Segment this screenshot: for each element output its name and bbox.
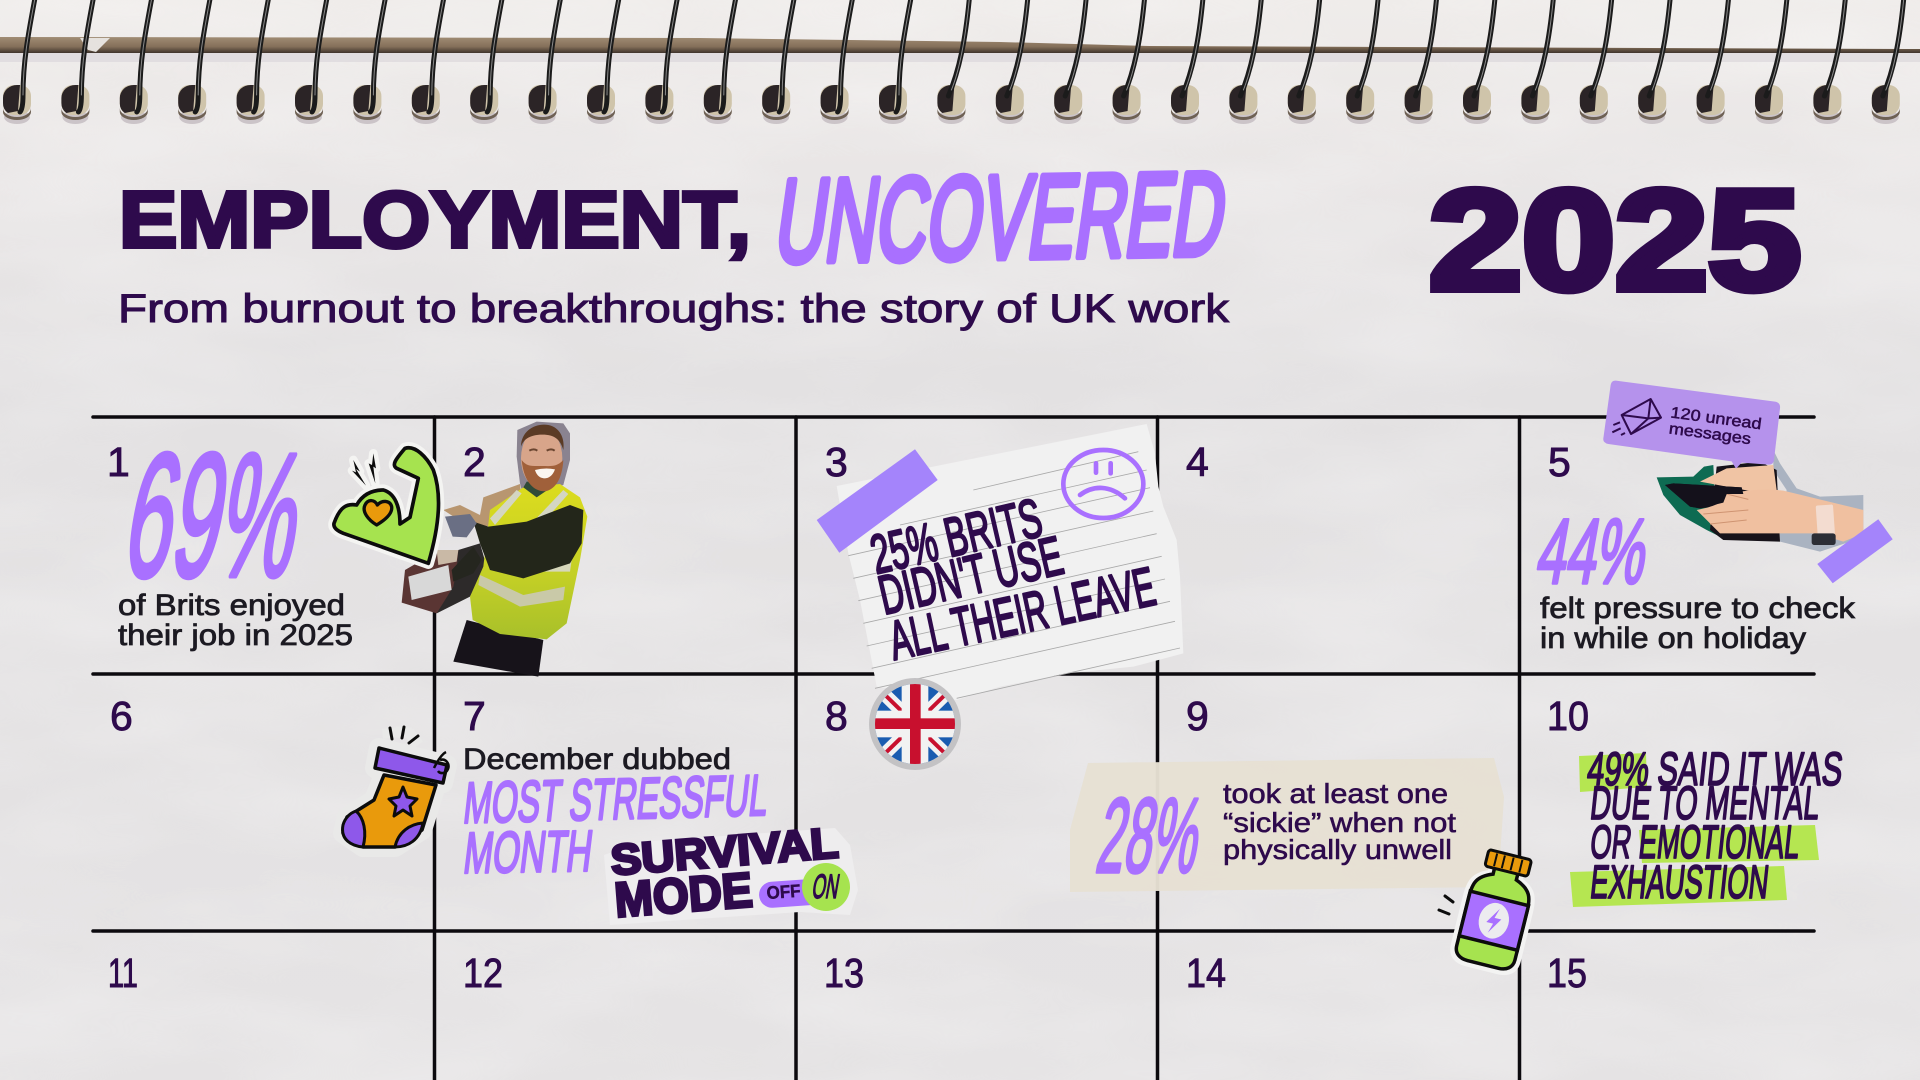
title: EMPLOYMENT, xyxy=(119,175,751,264)
sticker: survival mode toggle: OFF xyxy=(766,881,801,903)
day numbers: 7 xyxy=(463,693,486,739)
day numbers: 14 xyxy=(1186,950,1226,996)
icon: union flag badge xyxy=(869,678,961,770)
masking tape: 28 percent: “sickie” when not xyxy=(1223,807,1456,838)
stat: 44 percent: in while on holiday xyxy=(1540,622,1806,655)
day numbers: 6 xyxy=(110,693,133,739)
day numbers: 1 xyxy=(107,439,130,485)
subtitle: From burnout to breakthroughs: the story of UK work xyxy=(118,287,1230,331)
stat: most stressful month: MONTH xyxy=(460,819,596,886)
stat: 69 percent: of Brits enjoyed xyxy=(118,589,345,622)
masking tape: 28 percent: took at least one xyxy=(1223,778,1448,809)
photo: hands holding phone xyxy=(1657,450,1863,552)
speech bubble: 120 unread messages: messages xyxy=(1668,420,1752,448)
masking tape: 28 percent xyxy=(1070,758,1504,895)
day numbers: 8 xyxy=(825,693,848,739)
bottle motion marks xyxy=(1439,896,1453,914)
masking tape: 28 percent: physically unwell xyxy=(1223,834,1452,865)
day numbers: 4 xyxy=(1186,439,1209,485)
stat: 44 percent: 44% xyxy=(1531,500,1657,603)
stat: most stressful month: MOST STRESSFUL xyxy=(461,763,772,836)
torn note: 25 percent: ALL THEIR LEAVE xyxy=(884,555,1161,672)
day numbers: 15 xyxy=(1547,950,1587,996)
purple tape on note xyxy=(817,449,938,553)
stat: 44 percent: felt pressure to check xyxy=(1540,592,1856,625)
day numbers: 12 xyxy=(463,950,503,996)
day numbers xyxy=(107,439,1589,996)
torn note: 25 percent: 25% BRITS xyxy=(865,486,1048,586)
title: UNCOVERED xyxy=(768,149,1235,288)
sticker: survival mode toggle: MODE xyxy=(613,863,754,928)
stat: most stressful month xyxy=(460,743,772,886)
sticker: survival mode toggle: SURVIVAL xyxy=(609,819,840,885)
year: 2025 xyxy=(1429,161,1801,320)
stat: 69 percent: 69% xyxy=(113,416,318,614)
stat: 69 percent xyxy=(113,416,353,652)
speech bubble: 120 unread messages: 120 unread xyxy=(1669,404,1763,433)
icon: flexed arm sticker xyxy=(334,448,439,563)
day numbers: 11 xyxy=(108,950,138,996)
day numbers: 9 xyxy=(1186,693,1209,739)
green highlights xyxy=(1570,753,1819,907)
icon: medicine bottle sticker xyxy=(1451,847,1541,974)
calendar grid xyxy=(93,417,1814,1080)
day numbers: 13 xyxy=(824,950,864,996)
icon: sad face xyxy=(1063,450,1143,518)
title xyxy=(119,149,1235,288)
sticker: survival mode toggle xyxy=(604,819,858,928)
icon: christmas stocking sticker xyxy=(343,727,449,847)
day numbers: 10 xyxy=(1547,693,1589,739)
photo: smiling worker in hi-vis vest xyxy=(402,422,587,677)
day numbers: 5 xyxy=(1548,439,1571,485)
masking tape: 28 percent: 28% xyxy=(1090,776,1211,895)
stat: 49 percent xyxy=(1585,742,1846,908)
stat: 49 percent: EXHAUSTION xyxy=(1588,855,1772,908)
stat: 69 percent: their job in 2025 xyxy=(118,619,353,652)
tape beside hands xyxy=(1817,519,1893,583)
icon: envelope xyxy=(1612,399,1661,435)
sticker: survival mode toggle: ON xyxy=(810,868,842,906)
torn note: 25 percent xyxy=(837,424,1183,700)
spiral binding xyxy=(0,0,1920,124)
stat: 44 percent xyxy=(1531,500,1856,655)
speech bubble: 120 unread messages xyxy=(1603,381,1780,469)
torn note: 25 percent: DIDN'T USE xyxy=(873,524,1069,626)
day numbers: 2 xyxy=(463,439,486,485)
day numbers: 3 xyxy=(825,439,848,485)
stat: most stressful month: December dubbed xyxy=(463,743,731,776)
